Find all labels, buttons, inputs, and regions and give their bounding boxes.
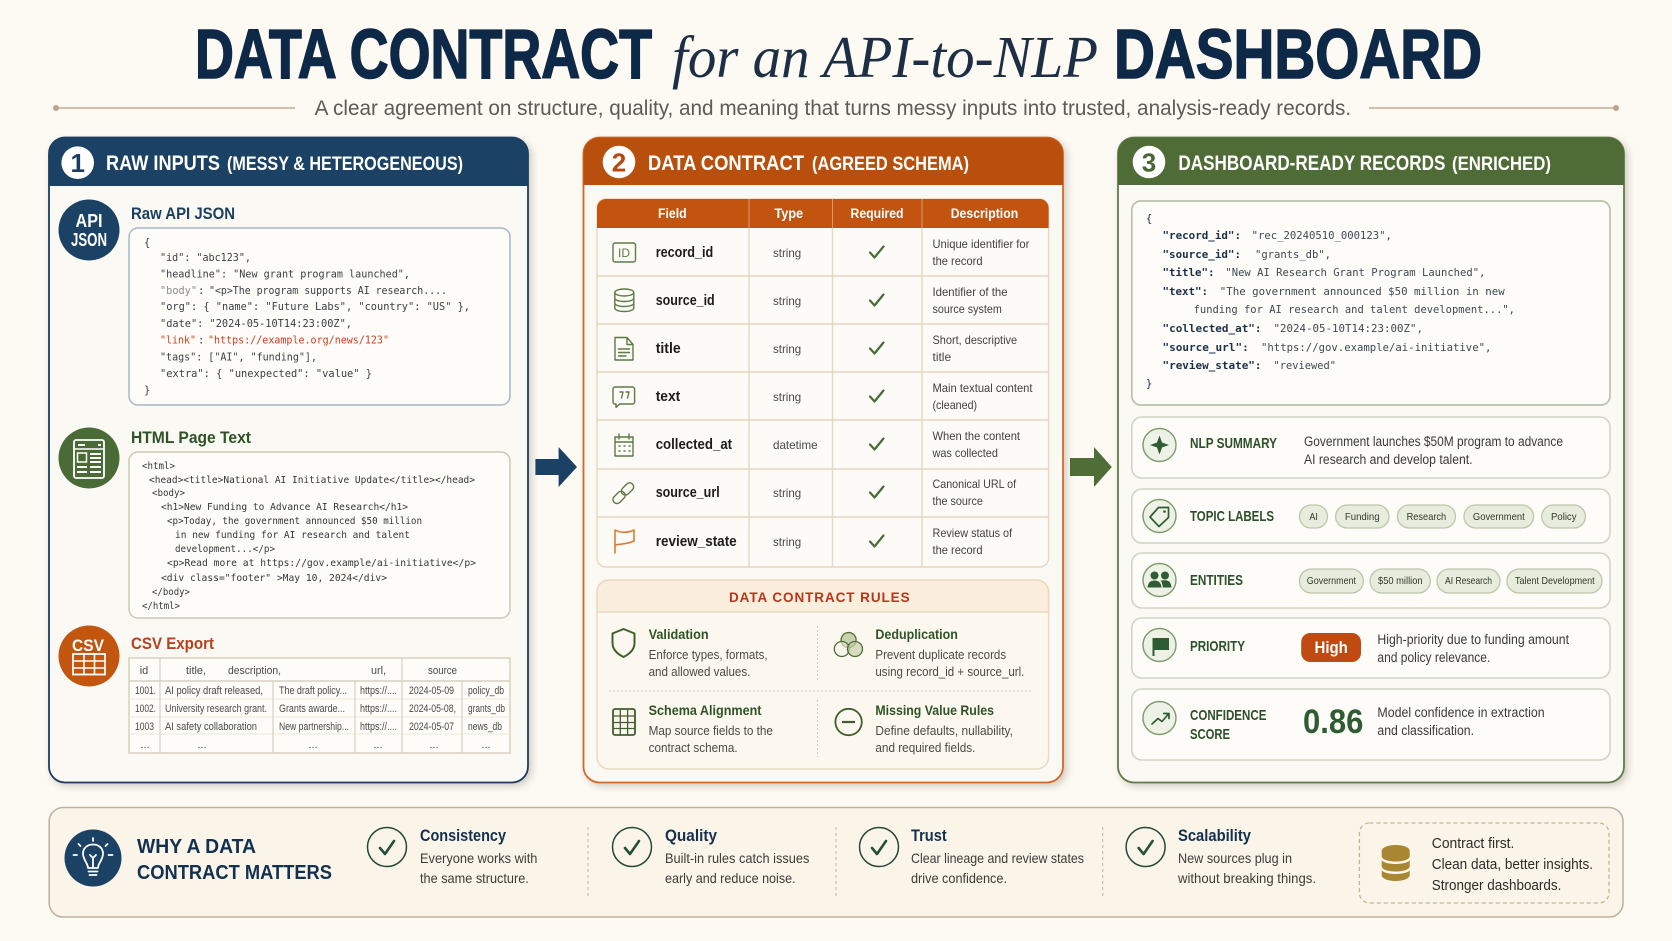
title: for an API-to-NLP xyxy=(672,24,1098,90)
rule: missing value rules: Missing Value Rules xyxy=(875,702,994,718)
callout: contract first xyxy=(1359,823,1609,903)
benefit: consistency xyxy=(368,827,537,886)
rule: schema alignment xyxy=(613,702,773,755)
table: CSV export: AI safety collaboration xyxy=(165,721,257,733)
title: DATA CONTRACT xyxy=(195,15,652,93)
code block: enriched record: "rec_20240510_000123", xyxy=(1252,229,1392,242)
title xyxy=(195,15,1482,93)
table: CSV export: id xyxy=(140,665,148,677)
code block: enriched record xyxy=(1132,201,1610,405)
icon: people xyxy=(1143,564,1176,596)
benefit: quality: Quality xyxy=(665,827,718,845)
panel: data contract xyxy=(584,138,1063,782)
code block: enriched record: "record_id": xyxy=(1162,229,1241,242)
row: title: title xyxy=(932,350,951,364)
row: source_url: the source xyxy=(932,494,983,508)
row: source_id xyxy=(615,285,1008,316)
card: priority: and policy relevance. xyxy=(1377,650,1490,665)
arrow: raw inputs to contract xyxy=(535,447,577,487)
panel: raw inputs xyxy=(49,138,528,782)
row: text: Main textual content xyxy=(932,381,1033,395)
code block: enriched record: { xyxy=(1146,212,1152,225)
code block: enriched record: "The government announced $50 million in new xyxy=(1220,285,1505,298)
icon: speech bubble xyxy=(613,387,635,408)
chips: topics: Government xyxy=(1473,511,1525,523)
table: CSV export: ... xyxy=(308,739,318,751)
row: collected_at: was collected xyxy=(932,446,998,460)
chips: entities: $50 million xyxy=(1378,575,1423,587)
table: CSV export: 1002. xyxy=(135,703,156,715)
chips: topics xyxy=(1299,505,1585,528)
rule: validation: and allowed values. xyxy=(649,665,750,679)
code block: raw API JSON: "extra": { "unexpected": "value" } xyxy=(160,368,372,380)
benefit: consistency: Everyone works with xyxy=(420,850,537,866)
code block: HTML page: <div class="footer" >May 10, 2024</div> xyxy=(161,573,387,584)
code block: enriched record: } xyxy=(1146,377,1152,390)
heading: why a data contract matters: WHY A DATA xyxy=(137,835,256,858)
row: text: (cleaned) xyxy=(932,398,977,412)
chips: topics: Research xyxy=(1407,511,1446,523)
code block: HTML page: <head><title>National AI Initiative Update</title></head> xyxy=(149,475,475,486)
panel header: raw inputs xyxy=(49,138,528,186)
chips: topics: Policy xyxy=(1551,511,1577,523)
card: confidence score xyxy=(1132,689,1610,760)
code block: enriched record: "reviewed" xyxy=(1274,359,1336,372)
icon: light bulb xyxy=(64,830,122,886)
row: title: Short, descriptive xyxy=(932,333,1017,347)
chips: entities: AI Research xyxy=(1445,575,1492,587)
benefit: trust: Trust xyxy=(911,827,947,845)
table: CSV export: ... xyxy=(197,739,207,751)
callout: contract first: Stronger dashboards. xyxy=(1432,878,1561,894)
code block: enriched record: "review_state": xyxy=(1162,359,1262,372)
panel header: data contract: DATA CONTRACT xyxy=(648,152,804,175)
badge: high: High xyxy=(1314,638,1348,657)
benefit: trust: Clear lineage and review states xyxy=(911,850,1084,866)
benefit: quality: early and reduce noise. xyxy=(665,870,796,886)
icon: trend chart xyxy=(1143,702,1176,734)
panel: why a data contract matters xyxy=(49,808,1623,917)
code block: raw API JSON xyxy=(129,228,510,405)
code block: enriched record: "text": xyxy=(1162,285,1208,298)
row: source_url xyxy=(611,477,1017,508)
rule: deduplication: Prevent duplicate records xyxy=(875,648,1006,662)
row: title xyxy=(615,333,1017,364)
card: confidence score: and classification. xyxy=(1377,723,1474,738)
panel header: raw inputs: 1 xyxy=(70,148,85,178)
code block: HTML page: <h1>New Funding to Advance AI Research</h1> xyxy=(161,502,408,513)
icon: priority flag xyxy=(1143,628,1176,662)
heading: Raw API JSON: Raw API JSON xyxy=(131,205,235,223)
icon: database gold xyxy=(1382,845,1410,881)
icon: document xyxy=(615,338,633,360)
chips: entities: Talent Development xyxy=(1515,575,1595,587)
subtitle: A clear agreement on structure, quality, and meaning that turns messy inputs into trusted, analysis-ready records. xyxy=(315,97,1351,120)
benefit: consistency: Consistency xyxy=(420,827,507,845)
row: source_id: source system xyxy=(932,302,1002,316)
row: text: text xyxy=(656,389,680,405)
benefit: scalability: Scalability xyxy=(1178,827,1252,845)
table: CSV export: University research grant. xyxy=(165,703,267,715)
panel header: data contract: (AGREED SCHEMA) xyxy=(812,153,969,175)
row: source_id: string xyxy=(773,294,801,308)
heading: HTML Page Text: HTML Page Text xyxy=(131,429,251,447)
row: source_id: Identifier of the xyxy=(932,285,1008,299)
code block: raw API JSON: : xyxy=(198,285,204,297)
icon: CSV badge xyxy=(58,626,120,686)
code block: enriched record: funding for AI research and talent development...", xyxy=(1194,303,1515,316)
callout: contract first: Contract first. xyxy=(1432,836,1514,852)
row: record_id: record_id xyxy=(656,245,713,261)
row: collected_at: When the content xyxy=(932,429,1021,443)
table: CSV export: 2024-05-08, xyxy=(409,703,456,715)
row: record_id xyxy=(613,237,1029,268)
code block: raw API JSON: : xyxy=(198,335,204,347)
code block: HTML page: <p>Read more at https://gov.example/ai-initiative</p> xyxy=(167,558,476,569)
panel header: raw inputs: (MESSY & HETEROGENEOUS) xyxy=(227,153,463,175)
panel header: data contract xyxy=(584,138,1063,185)
table: CSV export: Grants awarde... xyxy=(279,703,345,715)
code block: enriched record: "title": xyxy=(1162,266,1214,279)
code block: HTML page: <p>Today, the government announced $50 million xyxy=(167,516,422,527)
rule: missing value rules xyxy=(835,702,1013,755)
table: CSV export: 1003 xyxy=(135,721,154,733)
row: text: string xyxy=(773,390,801,404)
table header row: Type xyxy=(774,206,804,221)
benefit: scalability xyxy=(1126,827,1316,886)
row: text xyxy=(613,381,1033,412)
table header row xyxy=(597,199,1049,228)
card: NLP summary: NLP SUMMARY xyxy=(1190,435,1277,452)
benefit: scalability: New sources plug in xyxy=(1178,850,1292,866)
card: priority xyxy=(1132,618,1610,678)
title: DASHBOARD xyxy=(1114,15,1482,93)
callout: contract first: Clean data, better insights. xyxy=(1432,857,1593,873)
rule: missing value rules: Define defaults, nullability, xyxy=(875,724,1013,738)
icon: calendar xyxy=(615,434,633,456)
rule: deduplication xyxy=(834,626,1024,679)
icon: CSV badge: CSV xyxy=(72,636,105,655)
chips: topics: AI xyxy=(1309,511,1318,523)
panel header: raw inputs: RAW INPUTS xyxy=(106,152,220,175)
code block: raw API JSON: } xyxy=(144,385,150,397)
panel header: data contract: 2 xyxy=(612,148,626,178)
card: confidence score: Model confidence in extraction xyxy=(1377,705,1545,720)
rule: schema alignment: contract schema. xyxy=(649,741,738,755)
row: review_state: the record xyxy=(932,543,982,557)
icon: id xyxy=(613,243,636,262)
chips: topics: Funding xyxy=(1345,511,1380,523)
code block: HTML page: <body> xyxy=(152,488,185,499)
row: review_state xyxy=(615,526,1013,557)
rules heading: DATA CONTRACT RULES xyxy=(729,590,910,605)
row: review_state: string xyxy=(773,535,801,549)
table: CSV export: source xyxy=(428,665,457,677)
table header row: Description xyxy=(951,206,1018,221)
icon: flag xyxy=(615,530,634,553)
table: schema fields xyxy=(597,199,1049,567)
code block: raw API JSON: "tags": ["AI", "funding"], xyxy=(160,352,317,364)
code block: enriched record: "collected_at": xyxy=(1162,322,1262,335)
table: CSV export: AI policy draft released, xyxy=(165,685,263,697)
table: CSV export: https://.... xyxy=(360,703,397,715)
badge: high xyxy=(1301,633,1361,662)
table: CSV export: ... xyxy=(140,739,150,751)
row: source_url: string xyxy=(773,486,801,500)
code block: raw API JSON: "org": { "name": "Future Labs", "country": "US" }, xyxy=(160,301,470,313)
code block: enriched record: "source_url": xyxy=(1162,341,1249,354)
table: CSV export: policy_db xyxy=(468,685,504,697)
table: CSV export: news_db xyxy=(468,721,502,733)
rule: deduplication: Deduplication xyxy=(875,626,958,642)
code block: HTML page: in new funding for AI research and talent xyxy=(175,530,410,541)
table: CSV export xyxy=(129,658,510,753)
benefit: quality: Built-in rules catch issues xyxy=(665,850,809,866)
table: CSV export: url, xyxy=(371,665,386,677)
panel header: dashboard-ready records: DASHBOARD-READY RECORDS xyxy=(1178,152,1445,175)
row: source_url: Canonical URL of xyxy=(932,477,1017,491)
row: record_id: the record xyxy=(932,254,982,268)
table: CSV export: https://.... xyxy=(360,721,397,733)
table: CSV export: 2024-05-07 xyxy=(409,721,454,733)
code block: raw API JSON: "headline": "New grant program launched", xyxy=(160,269,410,281)
card: priority: PRIORITY xyxy=(1190,638,1245,655)
code block: raw API JSON: "<p>The program supports AI research.... xyxy=(209,285,447,297)
row: record_id: Unique identifier for xyxy=(932,237,1029,251)
code block: raw API JSON: "body" xyxy=(160,285,197,297)
row: collected_at: datetime xyxy=(773,438,818,452)
table header row: Field xyxy=(658,206,687,221)
row: collected_at: collected_at xyxy=(656,437,732,453)
card: entities: ENTITIES xyxy=(1190,572,1243,589)
chips: entities: Government xyxy=(1307,575,1356,587)
card: priority: High-priority due to funding amount xyxy=(1377,632,1569,647)
code block: enriched record: "New AI Research Grant Program Launched", xyxy=(1225,266,1485,279)
code block: HTML page: <html> xyxy=(142,461,175,472)
table: CSV export: 2024-05-09 xyxy=(409,685,454,697)
panel header: dashboard-ready records: 3 xyxy=(1142,148,1156,178)
chips: entities xyxy=(1299,569,1602,593)
panel: dashboard-ready records xyxy=(1118,138,1624,782)
row: title: string xyxy=(773,342,801,356)
rule: deduplication: using record_id + source_url. xyxy=(875,665,1024,679)
benefit: scalability: without breaking things. xyxy=(1177,870,1316,886)
card: NLP summary xyxy=(1132,417,1610,478)
rules box xyxy=(597,580,1049,769)
heading: CSV Export: CSV Export xyxy=(131,635,214,653)
code block: enriched record: "2024-05-10T14:23:00Z", xyxy=(1274,322,1423,335)
table: CSV export: ... xyxy=(373,739,383,751)
card: NLP summary: AI research and develop talent. xyxy=(1304,452,1472,467)
code block: enriched record: "source_id": xyxy=(1162,248,1241,261)
row: title: title xyxy=(656,341,681,357)
icon: sparkle xyxy=(1143,428,1176,462)
panel header: dashboard-ready records: (ENRICHED) xyxy=(1452,153,1551,175)
row: source_url: source_url xyxy=(656,485,720,501)
code block: enriched record: "grants_db", xyxy=(1255,248,1331,261)
rule: validation xyxy=(612,626,768,679)
icon: API JSON badge: API xyxy=(76,211,102,231)
card: confidence score: SCORE xyxy=(1190,726,1230,743)
table header row: Required xyxy=(850,206,904,221)
rule: schema alignment: Map source fields to the xyxy=(649,724,773,738)
icon: HTML page badge xyxy=(58,428,120,488)
rule: missing value rules: and required fields. xyxy=(875,741,975,755)
heading: why a data contract matters: CONTRACT MATTERS xyxy=(137,861,332,884)
code block: raw API JSON: "link" xyxy=(160,335,196,347)
table: CSV export: The draft policy... xyxy=(279,685,347,697)
rule: validation: Enforce types, formats, xyxy=(649,648,768,662)
icon: API JSON badge: JSON xyxy=(71,230,107,250)
rule: schema alignment: Schema Alignment xyxy=(649,702,762,718)
icon: API JSON badge xyxy=(58,200,120,260)
table: CSV export: title, xyxy=(186,665,206,677)
rule: validation: Validation xyxy=(649,626,709,642)
row: review_state: review_state xyxy=(656,534,737,550)
code block: enriched record: "https://gov.example/ai-initiative", xyxy=(1261,341,1491,354)
code block: HTML page: </body> xyxy=(152,587,190,598)
arrow: contract to dashboard records xyxy=(1070,447,1112,487)
panel header: dashboard-ready records xyxy=(1118,138,1624,185)
code block: raw API JSON: { xyxy=(144,237,150,249)
table: CSV export: ... xyxy=(429,739,439,751)
table: CSV export: 1001. xyxy=(135,685,156,697)
benefit: quality xyxy=(612,827,809,886)
benefit: consistency: the same structure. xyxy=(420,870,529,886)
code block: HTML page: </html> xyxy=(142,601,180,612)
code block: HTML page: development...</p> xyxy=(175,544,275,555)
code block: HTML page xyxy=(129,452,510,618)
icon: link xyxy=(611,481,635,505)
table: CSV export: New partnership... xyxy=(279,721,349,733)
score value: 0.86 xyxy=(1303,703,1363,741)
benefit: trust xyxy=(860,827,1084,886)
code block: raw API JSON: "id": "abc123", xyxy=(160,252,251,264)
subtitle xyxy=(53,97,1619,120)
icon: tag xyxy=(1143,500,1176,532)
table: CSV export: grants_db xyxy=(468,703,505,715)
icon: database xyxy=(615,289,634,312)
table: CSV export: ... xyxy=(481,739,491,751)
card: NLP summary: Government launches $50M program to advance xyxy=(1304,434,1563,449)
row: record_id: string xyxy=(773,246,801,260)
code block: raw API JSON: "https://example.org/news/123" xyxy=(208,335,389,347)
row: review_state: Review status of xyxy=(932,526,1013,540)
table: CSV export: https://.... xyxy=(360,685,397,697)
heading: why a data contract matters xyxy=(137,835,332,884)
card: topic labels xyxy=(1132,489,1610,543)
row: source_id: source_id xyxy=(656,293,715,309)
code block: raw API JSON: "date": "2024-05-10T14:23:00Z", xyxy=(160,318,352,330)
table: CSV export: description, xyxy=(228,665,281,677)
card: topic labels: TOPIC LABELS xyxy=(1190,508,1274,525)
benefit: trust: drive confidence. xyxy=(911,870,1007,886)
icon: id: ID xyxy=(618,246,630,260)
card: entities xyxy=(1132,553,1610,608)
row: collected_at xyxy=(615,429,1021,460)
card: confidence score: CONFIDENCE xyxy=(1190,707,1266,724)
